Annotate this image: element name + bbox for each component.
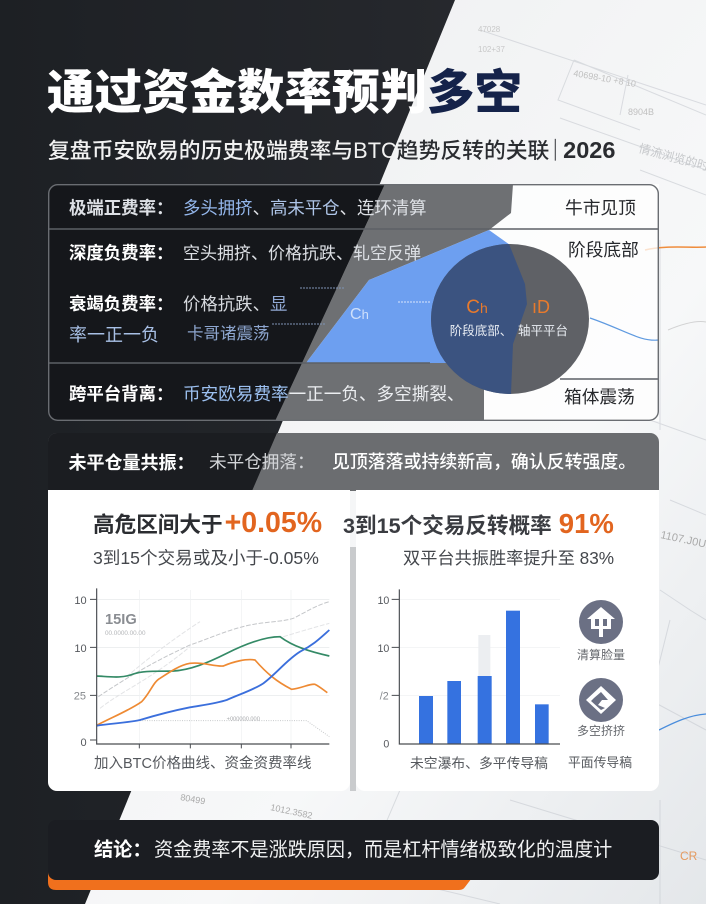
- subtitle: 复盘币安欧易的历史极端费率与BTC趋势反转的关联｜2026: [48, 137, 615, 163]
- icon label: liquidation: 清算脸量: [577, 648, 625, 662]
- bar chart: 10: [377, 643, 389, 655]
- right label: range: 箱体震荡: [564, 387, 635, 407]
- circle badge: 阶段底部、: [450, 323, 512, 338]
- caption right: 平面传导稿: [568, 755, 632, 770]
- band label: 未平仓量共振：: [68, 453, 194, 473]
- line chart: 15IG: [105, 612, 137, 628]
- row: deep negative description: 空头拥挤、价格抗跌、轧空反弹: [183, 244, 421, 262]
- row: wrapped line tail: 卡哥诸震荡: [187, 325, 270, 343]
- circle badge: ıD: [532, 297, 550, 317]
- icon: long short diamond: [579, 678, 623, 722]
- circle badge: Ch: [466, 297, 488, 318]
- row: cross-platform divergence: 跨平台背离：: [69, 384, 173, 404]
- band description: 未平仓拥落：: [209, 452, 315, 472]
- band conclusion: 见顶落落或持续新高，确认反转强度。: [332, 452, 636, 472]
- icon: liquidation house: [579, 600, 623, 644]
- orange accent: [48, 872, 470, 890]
- bar chart: [377, 589, 560, 750]
- background: dark diagonal and faint chart paper: 40698-10 +8 10: [573, 68, 637, 89]
- panel: signal table: [48, 184, 659, 421]
- background: dark diagonal and faint chart paper: 80499: [180, 792, 206, 806]
- bar chart: /2: [380, 690, 389, 702]
- conclusion text: 资金费率不是涨跌原因，而是杠杆情绪极致化的温度计: [154, 840, 612, 861]
- card sub heading: 3到15个交易或及小于-0.05%: [93, 548, 319, 568]
- background: dark diagonal and faint chart paper: 1012.3582: [270, 802, 313, 821]
- line chart: 10: [74, 595, 87, 607]
- band dark part: [48, 433, 277, 490]
- row: wrapped line: 率一正一负: [69, 325, 159, 345]
- right label: stage bottom: 阶段底部: [568, 240, 639, 260]
- row: extreme positive description: 多头拥挤、高未平仓、连环清算: [183, 198, 427, 218]
- row: cross-platform description: 币安欧易费率一正一负、多空撕裂、: [183, 384, 465, 404]
- background: dark diagonal and faint chart paper: 102+37: [478, 45, 505, 54]
- caption: 加入BTC价格曲线、资金资费率线: [94, 756, 312, 772]
- row: extreme positive: 极端正费率：: [69, 198, 173, 218]
- card sub heading: 双平台共振胜率提升至 83%: [403, 548, 614, 568]
- overlay text on blue: Ch: [350, 306, 369, 323]
- bar chart: 0: [383, 738, 389, 750]
- background: dark diagonal and faint chart paper: CR: [680, 849, 698, 863]
- conclusion box: [48, 820, 659, 880]
- caption left: 未空瀑布、多平传导稿: [410, 756, 548, 771]
- row: deep negative: 深度负费率：: [69, 242, 173, 262]
- card: right chart: [356, 490, 659, 791]
- circle badge: 轴平平台: [518, 323, 568, 338]
- icon label: long short: 多空挤挤: [577, 724, 625, 738]
- card: left chart: [48, 490, 350, 791]
- card divider: [350, 547, 356, 791]
- line chart: 10: [74, 643, 87, 655]
- bar chart: 10: [377, 595, 389, 607]
- card heading: 3到15个交易反转概率 91%: [343, 508, 614, 539]
- line chart: +000000.000: [227, 717, 260, 723]
- background: dark diagonal and faint chart paper: 47028: [478, 25, 501, 34]
- card heading: 高危区间大于+0.05%: [93, 507, 322, 539]
- line chart: 0: [81, 737, 87, 749]
- background: dark diagonal and faint chart paper: 8904B: [628, 107, 654, 117]
- right label: bull top: 牛市见顶: [565, 198, 636, 218]
- conclusion label: 结论：: [94, 840, 152, 861]
- panel backdrop shapes: [48, 184, 659, 421]
- line chart: [74, 588, 330, 749]
- line chart: 25: [74, 690, 86, 702]
- band: open interest resonance: [48, 433, 659, 491]
- circle badge: [431, 244, 589, 394]
- conclusion bar: [48, 820, 659, 890]
- row: exhausted negative: 衰竭负费率：: [69, 294, 173, 314]
- row: exhausted negative description: 价格抗跌、显: [183, 294, 287, 314]
- line chart: 00.0000.00.00: [105, 630, 146, 637]
- title: 通过资金数率预判多空: [47, 67, 522, 120]
